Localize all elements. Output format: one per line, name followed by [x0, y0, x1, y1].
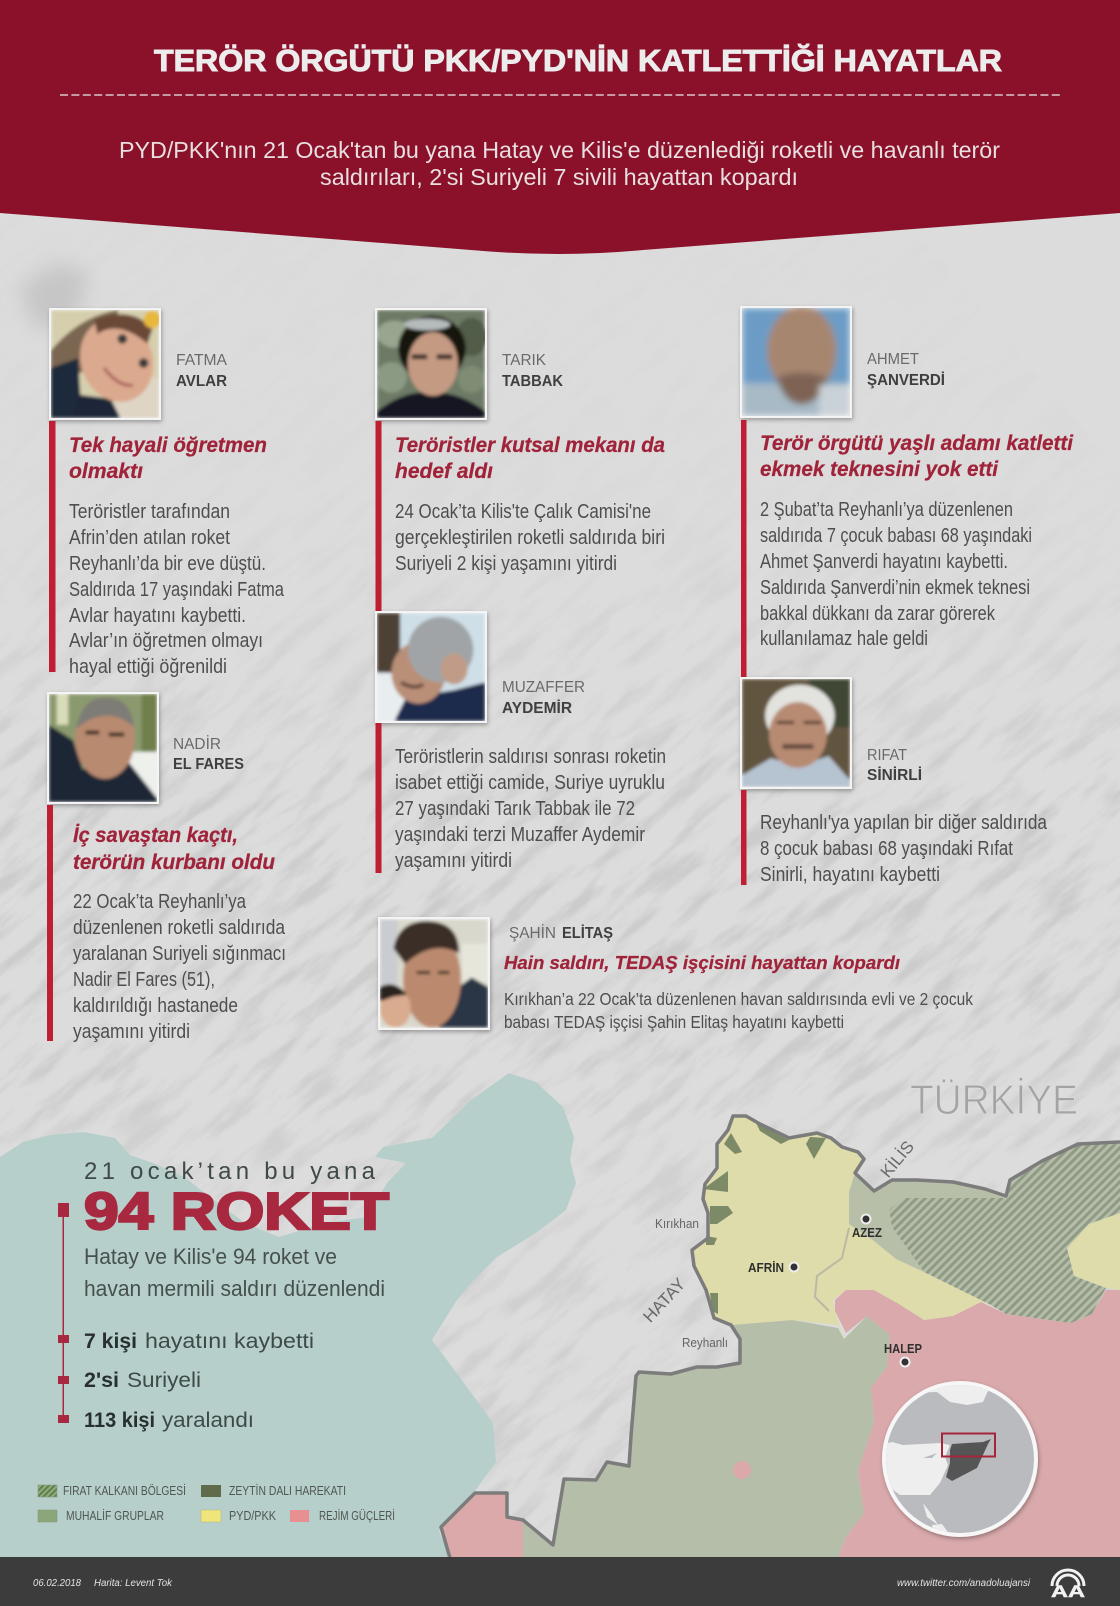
- name: TARIK: [502, 352, 546, 369]
- body text: babası TEDAŞ işçisi Şahin Elitaş hayatını kaybetti: [504, 1012, 844, 1032]
- body text: Afrin’den atılan roket: [69, 527, 230, 549]
- region: Euphrates Shield hatched: [889, 1144, 1120, 1323]
- label: Reyhanlı: Reyhanlı: [682, 1335, 728, 1350]
- heading: İç savaştan kaçtı,: [73, 824, 238, 847]
- label: Kırıkhan: Kırıkhan: [655, 1216, 699, 1231]
- body text: Reyhanlı'ya yapılan bir diğer saldırıda: [760, 812, 1048, 834]
- legend: regime: [290, 1509, 395, 1523]
- name: AYDEMİR: [502, 699, 572, 717]
- stat: Syrians: 2'si: [84, 1369, 119, 1392]
- body text: 8 çocuk babası 68 yaşındaki Rıfat: [760, 838, 1013, 860]
- body text: Avlar’ın öğretmen olmayı: [69, 630, 263, 652]
- body text: kullanılamaz hale geldi: [760, 628, 928, 650]
- profile: Muzaffer Aydemir: [375, 611, 666, 873]
- legend: Euphrates Shield: FIRAT KALKANI BÖLGESİ: [63, 1484, 186, 1498]
- description: Hatay ve Kilis'e 94 roket ve: [84, 1244, 337, 1269]
- subtitle: [119, 137, 1000, 190]
- body text: hayal ettiği öğrenildi: [69, 656, 227, 678]
- label: Halep: [884, 1341, 922, 1366]
- legend: opposition: MUHALİF GRUPLAR: [66, 1509, 164, 1523]
- body text: Teröristler tarafından: [69, 501, 230, 523]
- legend: Olive Branch: ZEYTİN DALI HAREKATI: [229, 1484, 346, 1498]
- name: [502, 679, 585, 717]
- photo: Fatma Avlar: [49, 308, 165, 420]
- photo: Şahin Elitaş: [378, 917, 490, 1030]
- stat: wounded: [84, 1409, 254, 1432]
- profile: Rıfat Sinirli: [740, 677, 1048, 886]
- stat: killed: [84, 1330, 314, 1353]
- region: Olive Branch operation: [703, 1123, 826, 1314]
- body text: Saldırıda 17 yaşındaki Fatma: [69, 579, 285, 601]
- inset locator map: [880, 1380, 1040, 1540]
- heading: Hain saldırı, TEDAŞ işçisini hayattan kopardı: [504, 953, 900, 973]
- footer credits: Harita: Levent Tok: [94, 1578, 173, 1589]
- description: havan mermili saldırı düzenlendi: [84, 1276, 385, 1301]
- legend: [38, 1484, 395, 1523]
- name: ŞAHİN: [509, 923, 556, 942]
- legend: PYD/PKK: PYD/PKK: [229, 1509, 277, 1523]
- body text: yaşamını yitirdi: [395, 850, 512, 872]
- profile: Fatma Avlar: [49, 308, 285, 678]
- icon: AA logo: AA: [1051, 1582, 1085, 1601]
- stat: Syrians: Suriyeli: [127, 1369, 201, 1392]
- stat: wounded: yaralandı: [162, 1409, 254, 1432]
- heading: [760, 432, 1074, 481]
- name: [867, 747, 922, 784]
- body text: [760, 499, 1032, 650]
- name: [867, 351, 945, 389]
- body text: [395, 746, 666, 872]
- accent bar: [376, 723, 382, 873]
- heading: ekmek teknesini yok etti: [760, 458, 999, 481]
- region: opposition groups: [523, 1316, 890, 1558]
- heading: hedef aldı: [395, 460, 493, 483]
- body text: bakkal dükkanı da zarar görerek: [760, 603, 996, 625]
- body text: düzenlenen roketli saldırıda: [73, 917, 286, 939]
- body text: [69, 501, 285, 678]
- profile: Tarık Tabbak: [375, 308, 665, 611]
- profile: Ahmet Şanverdi: [740, 306, 1074, 677]
- body text: 27 yaşındaki Tarık Tabbak ile 72: [395, 798, 635, 820]
- label: Halep: HALEP: [884, 1341, 922, 1356]
- map labels: [639, 1076, 1078, 1366]
- region: PYD/PKK east: [1067, 1213, 1120, 1290]
- pink enclave: [733, 1461, 751, 1479]
- icon: AA logo: [1051, 1570, 1085, 1601]
- map: [0, 1073, 1120, 1558]
- stats panel: [58, 1158, 389, 1432]
- title: TERÖR ÖRGÜTÜ PKK/PYD'NİN KATLETTİĞİ HAYATLAR: [154, 43, 1002, 78]
- body text: yaralanan Suriyeli sığınmacı: [73, 943, 286, 965]
- body text: [395, 501, 665, 575]
- legend: opposition: [38, 1509, 164, 1523]
- photo: Nadir El Fares: [47, 692, 159, 804]
- stat: killed: hayatını kaybetti: [145, 1330, 314, 1353]
- body text: isabet ettiği camide, Suriye uyruklu: [395, 772, 665, 794]
- header band: [0, 0, 1120, 254]
- profile: Nadir El Fares: [47, 692, 286, 1043]
- overline: 21 ocak’tan bu yana: [84, 1158, 376, 1185]
- name: [509, 923, 613, 942]
- accent bar: [376, 421, 382, 611]
- name: NADİR: [173, 734, 221, 753]
- heading: Tek hayali öğretmen: [69, 434, 267, 457]
- accent bar: [741, 420, 746, 677]
- label: Kilis: KİLİS: [877, 1137, 918, 1181]
- name: ŞANVERDİ: [867, 371, 945, 389]
- region: Azez light green: [849, 1173, 1006, 1272]
- timeline: [58, 1203, 69, 1423]
- body text: kaldırıldığı hastanede: [73, 995, 238, 1017]
- description: [84, 1244, 385, 1301]
- label: Afrin: AFRİN: [748, 1260, 784, 1275]
- Turkish border: [441, 1116, 1120, 1558]
- heading: [69, 434, 267, 483]
- heading: [395, 434, 665, 483]
- locator rectangle: [942, 1434, 995, 1456]
- photo: Rıfat Sinirli: [740, 677, 852, 789]
- name: SİNİRLİ: [867, 766, 922, 784]
- body text: [504, 989, 973, 1032]
- legend: PYD/PKK: [201, 1509, 277, 1523]
- region: regime forces: [835, 1290, 1120, 1558]
- label: Hatay: HATAY: [639, 1275, 689, 1326]
- name: ELİTAŞ: [562, 924, 613, 942]
- legend: Olive Branch: [201, 1484, 346, 1498]
- subtitle: PYD/PKK'nın 21 Ocak'tan bu yana Hatay ve Kilis'e düzenlediği roketli ve havanlı terör: [119, 137, 1000, 163]
- body text: 22 Ocak’ta Reyhanlı’ya: [73, 891, 247, 913]
- accent bar: [49, 421, 56, 672]
- body text: Saldırıda Şanverdi’nin ekmek teknesi: [760, 577, 1030, 599]
- Syria: [946, 1439, 991, 1481]
- name: MUZAFFER: [502, 679, 585, 696]
- photo: Ahmet Şanverdi: [740, 306, 852, 418]
- name: AHMET: [867, 351, 919, 368]
- label: Azez: AZEZ: [852, 1225, 882, 1240]
- heading: Terör örgütü yaşlı adamı katletti: [760, 432, 1074, 455]
- twitter link text: www.twitter.com/anadoluajansi: [897, 1578, 1031, 1589]
- label: Türkiye: TÜRKİYE: [910, 1076, 1078, 1123]
- big number: 94 ROKET: [84, 1183, 389, 1241]
- name: FATMA: [176, 352, 227, 369]
- heading: terörün kurbanı oldu: [73, 851, 275, 874]
- body text: 2 Şubat’ta Reyhanlı’ya düzenlenen: [760, 499, 1013, 521]
- body text: Sinirli, hayatını kaybetti: [760, 864, 940, 886]
- label: Azez: [852, 1214, 882, 1240]
- body text: Nadir El Fares (51),: [73, 969, 215, 991]
- footer credits: [33, 1578, 173, 1589]
- accent bar: [741, 790, 746, 885]
- body text: Ahmet Şanverdi hayatını kaybetti.: [760, 551, 1008, 573]
- body text: [73, 891, 286, 1043]
- name: TABBAK: [502, 373, 563, 390]
- body text: 24 Ocak’ta Kilis'te Çalık Camisi'ne: [395, 501, 651, 523]
- stat: wounded: 113 kişi: [84, 1409, 155, 1432]
- heading: Teröristler kutsal mekanı da: [395, 434, 665, 457]
- body text: Kırıkhan’a 22 Ocak’ta düzenlenen havan saldırısında evli ve 2 çocuk: [504, 989, 973, 1009]
- body text: saldırıda 7 çocuk babası 68 yaşındaki: [760, 525, 1032, 547]
- stat: Syrians: [84, 1369, 201, 1392]
- profile: Şahin Elitaş: [378, 917, 973, 1032]
- region: PYD/PKK: [692, 1116, 989, 1339]
- heading: [73, 824, 275, 874]
- name: [502, 352, 563, 390]
- region: regime forces south-west: [441, 1493, 523, 1558]
- name: RIFAT: [867, 747, 907, 764]
- body text: gerçekleştirilen roketli saldırıda biri: [395, 527, 665, 549]
- heading: olmaktı: [69, 460, 143, 483]
- subtitle: saldırıları, 2'si Suriyeli 7 sivili hayattan kopardı: [320, 164, 798, 190]
- footer: [0, 1557, 1120, 1606]
- body text: Reyhanlı’da bir eve düştü.: [69, 553, 266, 575]
- footer credits: 06.02.2018: [33, 1578, 81, 1589]
- legend: regime: REJİM GÜÇLERİ: [319, 1509, 395, 1523]
- body text: [760, 812, 1048, 886]
- background terrain: [0, 262, 1120, 1519]
- body text: Suriyeli 2 kişi yaşamını yitirdi: [395, 553, 617, 575]
- river: [815, 1228, 849, 1311]
- body text: Avlar hayatını kaybetti.: [69, 605, 246, 627]
- body text: Teröristlerin saldırısı sonrası roketin: [395, 746, 666, 768]
- photo: Tarık Tabbak: [375, 308, 487, 420]
- name: EL FARES: [173, 756, 244, 773]
- accent bar: [47, 805, 53, 1041]
- sea: [0, 1073, 576, 1558]
- body text: yaşındaki terzi Muzaffer Aydemir: [395, 824, 645, 846]
- name: [176, 352, 227, 390]
- photo: Muzaffer Aydemir: [375, 611, 487, 723]
- body text: yaşamını yitirdi: [73, 1021, 190, 1043]
- stat: killed: 7 kişi: [84, 1330, 137, 1353]
- name: [173, 734, 244, 773]
- name: AVLAR: [176, 373, 227, 390]
